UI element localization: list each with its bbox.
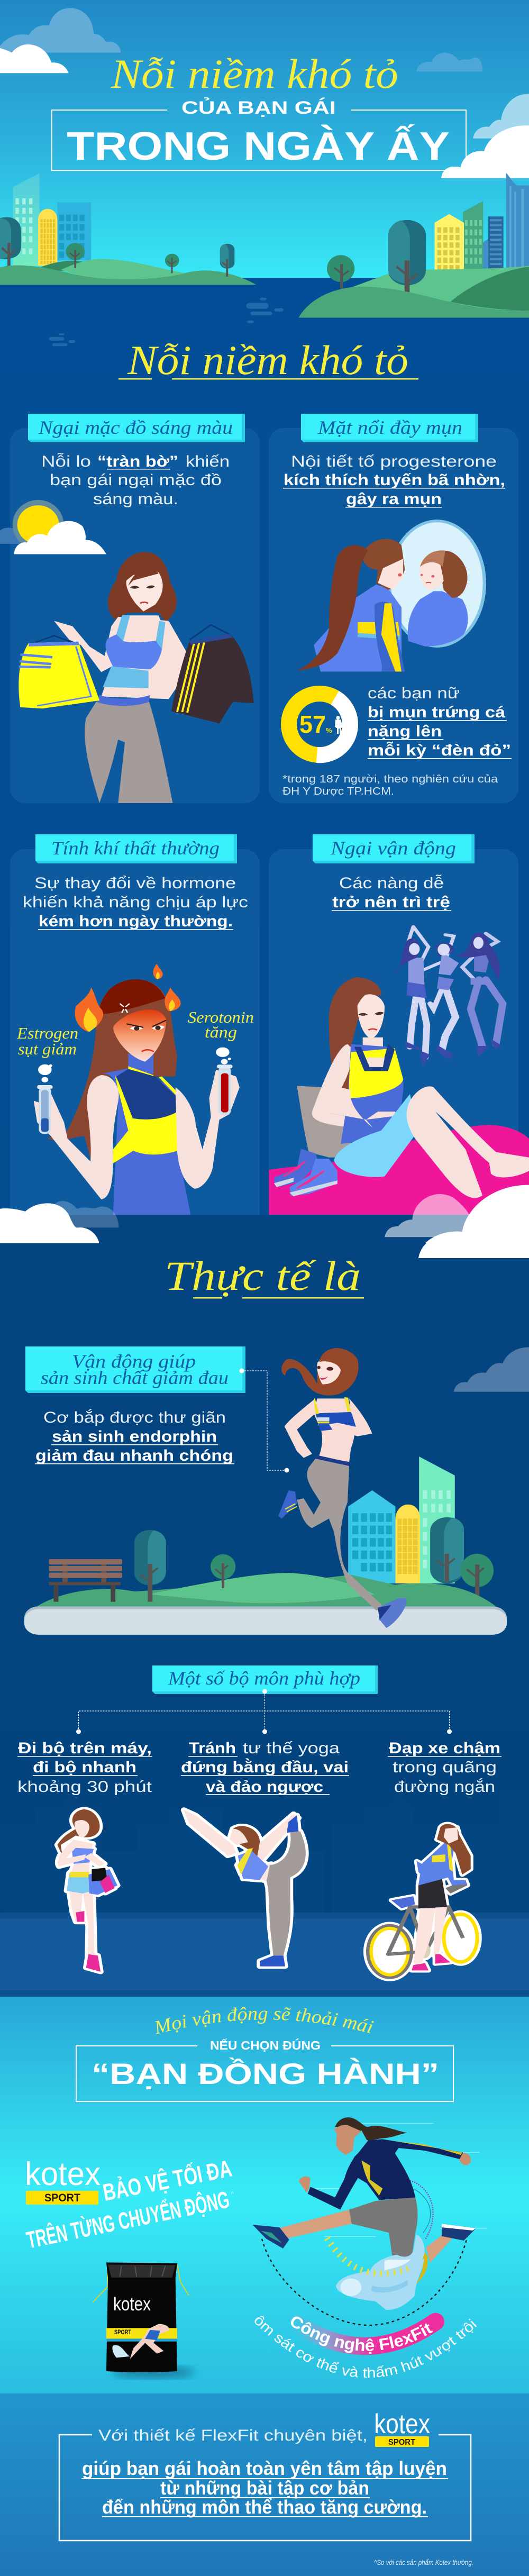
banner (313, 834, 475, 863)
woman (312, 977, 529, 1198)
panel: Ngại vận động (269, 834, 529, 1215)
label: package kotex: kotex (113, 2293, 151, 2315)
cloud: white right (425, 1185, 529, 1243)
hills (37, 1573, 496, 1606)
waistband (315, 1455, 350, 1467)
stat text: mỗi kỳ “đèn đỏ” (368, 741, 511, 759)
stat text: các bạn nữ (368, 685, 460, 702)
shoes (278, 1490, 297, 1518)
text: yoga: và đảo ngược (206, 1778, 323, 1796)
body text: kém hơn ngày thường. (39, 913, 233, 930)
pad (336, 2234, 425, 2310)
arm left (34, 1075, 119, 1199)
text: yoga: đứng bằng đầu, vai (181, 1758, 349, 1776)
intro: Với thiết kế FlexFit chuyên biệt, (98, 2427, 368, 2444)
pants (297, 1459, 385, 1610)
hair (335, 2117, 407, 2140)
illustration: resting woman (269, 927, 529, 1215)
labels: hormones: Serotonin (188, 1008, 254, 1026)
panel: Tính khí thất thường (10, 834, 260, 1215)
ground band (0, 1913, 529, 1997)
connector tree (76, 1689, 452, 1734)
skyline silhouette (3, 1794, 529, 1913)
slogan: BẢO VỆ TỐI ĐA (101, 2155, 234, 2206)
shoes (274, 1149, 338, 1196)
curve labels: FlexFit (255, 2316, 477, 2378)
footnote: *trong 187 người, theo nghiên cứu của (282, 773, 498, 785)
title: script line: Nỗi niềm khó tỏ (111, 51, 398, 97)
callout: exercise (25, 1346, 289, 1473)
body text (332, 875, 451, 911)
speed lines (316, 2123, 487, 2236)
yellow compression marks (327, 2238, 413, 2273)
cloud: translucent right (385, 1194, 529, 1237)
banner: Vận động giúp (72, 1351, 196, 1372)
labels: hormones: tăng (205, 1023, 237, 1041)
slogan: TRÊN TỪNG CHUYỂN ĐỘNG (24, 2186, 232, 2254)
statement: đến những môn thể thao tăng cường. (102, 2496, 427, 2518)
clouds: panel bottom (0, 1185, 529, 1243)
top (315, 1412, 358, 1431)
labels: hormones: sụt giảm (18, 1040, 77, 1058)
slogan: ^ (231, 2191, 234, 2197)
statement (81, 2457, 448, 2518)
text: yoga (181, 1740, 349, 1796)
trees: right (430, 1517, 494, 1599)
text: cycling: Đạp xe chậm (389, 1740, 500, 1757)
body text (283, 453, 505, 508)
symbol: anger mark (120, 1004, 130, 1013)
arm right (176, 1070, 240, 1189)
section: suitable sports (17, 1665, 501, 1796)
figure: yoga (184, 1810, 306, 1967)
body text (41, 453, 230, 508)
figure (297, 539, 405, 671)
title: frame (52, 110, 466, 170)
stat text: bị mụn trứng cá (368, 704, 505, 721)
body text: Cơ bắp được thư giãn (43, 1409, 226, 1426)
text: walking (17, 1740, 152, 1796)
text: cycling: đường ngắn (394, 1778, 495, 1796)
frame (76, 2046, 453, 2101)
banner: Mặt nổi đầy mụn (317, 417, 462, 438)
shoes (252, 2225, 289, 2249)
footnote: ^So với các sản phẩm Kotex thường. (374, 2558, 473, 2566)
hero illustration (0, 8, 529, 346)
park scene (24, 1347, 529, 1635)
statement: từ những bài tập cơ bản (160, 2477, 369, 2499)
text: yoga: tư thế yoga (243, 1740, 340, 1757)
body text: giảm đau nhanh chóng (35, 1447, 233, 1464)
cloud: white right continuation (418, 1243, 529, 1258)
text: cycling: trong quãng (393, 1759, 497, 1776)
cloud: white left (0, 1203, 99, 1243)
mirror (388, 520, 486, 648)
text: walking: đi bộ nhanh (33, 1759, 136, 1776)
background: dark navy (0, 1215, 529, 1913)
bench (49, 1559, 122, 1602)
tree: island capsule (220, 244, 234, 277)
stat text (368, 685, 512, 759)
body text: gây ra mụn (346, 490, 442, 508)
photo: athlete with pad (252, 2117, 487, 2346)
jacket (308, 2139, 463, 2210)
cloud: pale top left (0, 8, 121, 52)
closing box (59, 2409, 471, 2541)
section heading: Nỗi niềm khó tỏ: Nỗi niềm khó tỏ (127, 337, 408, 383)
banner: Ngại mặc đồ sáng màu (38, 417, 233, 438)
body text (35, 1409, 234, 1464)
shorts (349, 2197, 417, 2259)
band text: Công nghệ FlexFit (291, 2316, 433, 2354)
section: closing blue (0, 2393, 529, 2576)
logo: kotex sport: SPORT (44, 2192, 80, 2204)
title: main: TRONG NGÀY ẤY (67, 124, 450, 168)
illustration: woman at mirror (297, 520, 486, 671)
statement: giúp bạn gái hoàn toàn yên tâm tập luyện (82, 2457, 447, 2479)
banner: Ngại vận động (330, 838, 456, 859)
figure: walker (57, 1809, 117, 1972)
body text: sản sinh endorphin (52, 1428, 217, 1445)
banner (301, 414, 478, 442)
slogan (24, 2155, 234, 2254)
panel: Ngại mặc đồ sáng màu (0, 414, 260, 803)
arc script: Mọi vận động sẽ thoải mái (155, 2007, 373, 2034)
body text: Nội tiết tố progesterone (291, 453, 497, 470)
section heading: Thực tế là: Thực tế là (165, 1253, 361, 1299)
title: subtitle: CỦA BẠN GÁI (181, 98, 336, 118)
band caption: ôm sát cơ thể và thấm hút vượt trội (255, 2316, 477, 2378)
body text: kích thích tuyến bã nhờn, (284, 471, 505, 489)
hill: right island front (298, 287, 529, 318)
dancers (396, 927, 503, 1064)
body text: Sự thay đổi về hormone (34, 875, 236, 892)
footnote (282, 773, 498, 797)
cloud: right (454, 1347, 529, 1392)
banner (152, 1665, 378, 1694)
icon: flames (75, 963, 181, 1032)
frame (59, 2435, 471, 2541)
logo: kotex sport: SPORT (388, 2438, 415, 2447)
face (334, 2125, 361, 2155)
tree: island round (165, 254, 179, 273)
text: yoga: Tránh (189, 1740, 236, 1757)
logo: kotex sport: kotex (374, 2409, 430, 2440)
water marks (49, 298, 284, 346)
figures: sports (57, 1809, 479, 1979)
buildings: left group (13, 174, 91, 266)
package: kotex sport (93, 2262, 195, 2379)
face (317, 1360, 341, 1384)
cloud: translucent left (54, 1201, 119, 1227)
body text: trở nên trì trệ (332, 894, 450, 911)
body text: khiến khả năng chịu áp lực (23, 894, 248, 911)
road (24, 1606, 507, 1635)
band: FlexFit (290, 2319, 435, 2346)
pillow (297, 1086, 351, 1158)
footnote: ĐH Y Dược TP.HCM. (282, 786, 394, 797)
illustration: woman with shorts (0, 500, 254, 803)
tree: left tall (0, 217, 21, 266)
labels: hormones (16, 1008, 254, 1058)
background: sky (0, 0, 529, 278)
subtitle: NẾU CHỌN ĐÚNG (210, 2038, 321, 2052)
text: cycling (388, 1740, 501, 1796)
tree: small round left (66, 243, 85, 268)
banner (35, 834, 237, 863)
body text (23, 875, 248, 930)
banner (28, 414, 245, 442)
section: cyan product (0, 1997, 529, 2393)
shorts: yellow (19, 636, 99, 708)
cloud: white right (441, 125, 529, 178)
cloud: pale right (473, 94, 529, 139)
banner: Tính khí thất thường (51, 838, 220, 859)
text: walking: khoảng 30 phút (17, 1778, 152, 1796)
runner (278, 1348, 407, 1628)
legs (426, 2234, 456, 2263)
figure: cyclist (366, 1824, 479, 1979)
chart: 57% donut: % (326, 726, 332, 734)
icon: woman (335, 716, 343, 734)
label: package sport: SPORT (114, 2328, 132, 2336)
body text: bạn gái ngại mặc đồ (50, 471, 222, 489)
test tube: serotonin (216, 1048, 232, 1115)
body text: “tràn bờ” (97, 453, 178, 470)
trees: left (134, 1530, 235, 1602)
body text: sáng màu. (93, 490, 178, 508)
chart: 57% donut (289, 694, 350, 755)
connector (239, 1368, 289, 1473)
panel: Mặt nổi đầy mụn (269, 414, 518, 803)
fists (299, 2153, 471, 2193)
body text: khiến (186, 453, 230, 470)
background: navy water (0, 278, 529, 1215)
banner: sản sinh chất giảm đau (41, 1367, 229, 1388)
logo: kotex sport: kotex (25, 2156, 101, 2192)
buildings: right group (434, 173, 529, 275)
buildings (348, 1457, 455, 1583)
tree: round right (327, 255, 354, 289)
arms (285, 1398, 372, 1458)
icon: sun and cloud (0, 500, 106, 554)
arcs (262, 2181, 468, 2325)
heading: bạn đồng hành (76, 2007, 454, 2102)
tree: big capsule right (388, 220, 426, 293)
hills: right island (348, 266, 529, 311)
labels: hormones: Estrogen (16, 1024, 78, 1042)
cloud: small right (416, 53, 482, 71)
title (52, 51, 466, 170)
torso (314, 1398, 354, 1462)
arrow: yellow (416, 2252, 430, 2284)
shorts: black (171, 625, 254, 723)
body text: Các nàng dễ (339, 875, 444, 892)
banner: Một số bộ môn phù hợp (168, 1668, 360, 1689)
stat text: nặng lên (368, 723, 442, 740)
hair (281, 1348, 359, 1396)
chart: 57% donut: 57 (299, 711, 326, 738)
test tube: estrogen (37, 1064, 52, 1134)
hills: left island (0, 259, 257, 285)
body text: Nỗi lo (41, 453, 91, 470)
illustration: angry woman (34, 963, 240, 1215)
text: walking: Đi bộ trên máy, (18, 1740, 152, 1757)
main: “BẠN ĐỒNG HÀNH” (92, 2057, 439, 2090)
bed (269, 1125, 529, 1215)
cloud: white top left (0, 44, 68, 73)
banner (25, 1346, 245, 1393)
